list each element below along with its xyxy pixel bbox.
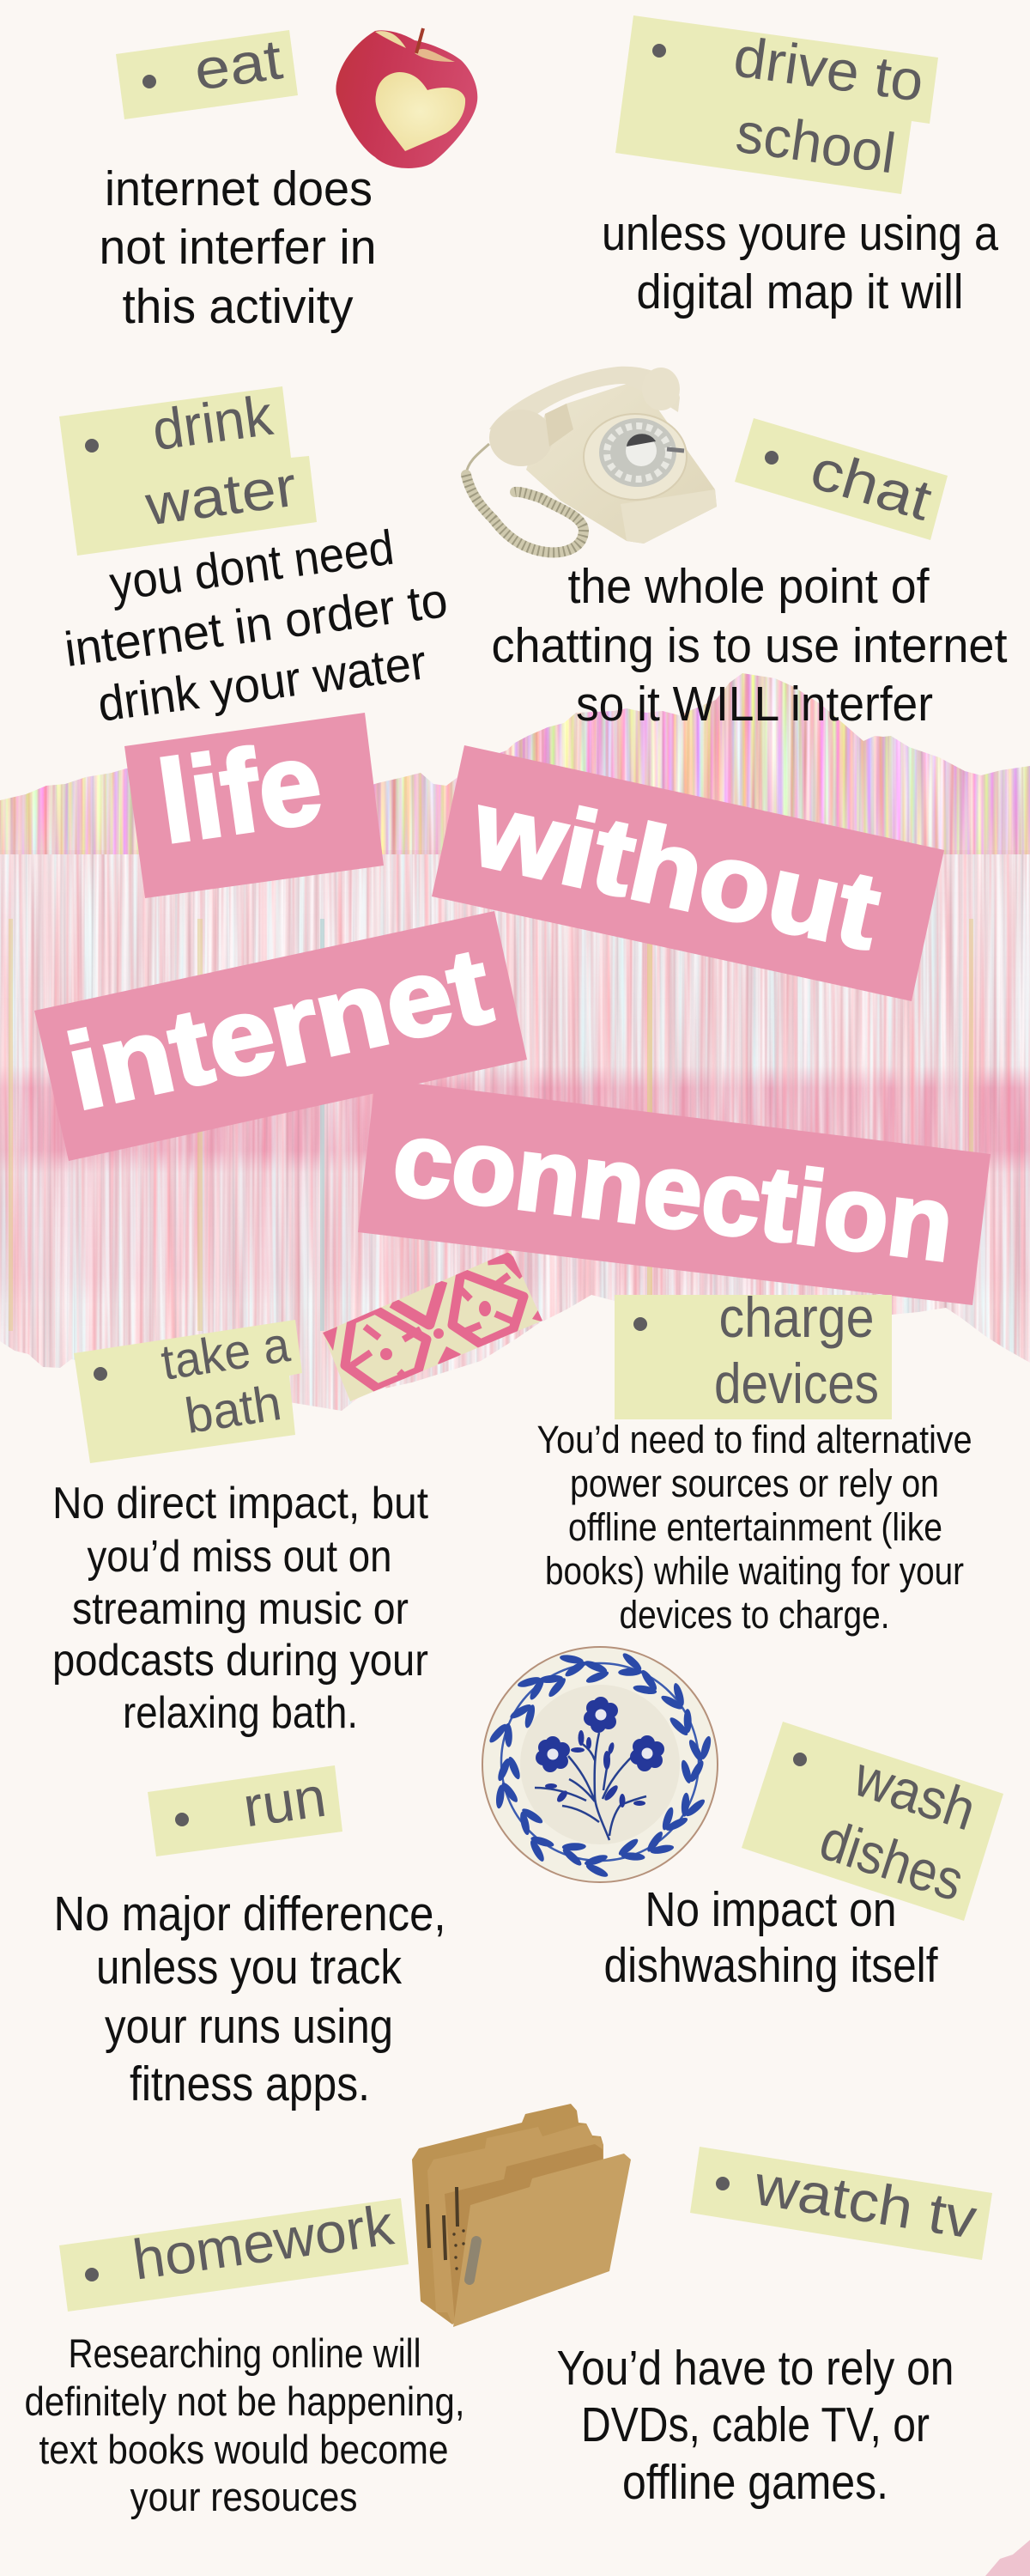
text: run description [53,1886,446,2111]
tag: drive to school: school [732,100,900,185]
text: take a bath description: No direct impact, but [52,1479,428,1528]
torn paper band with woven stripes [0,670,1030,1417]
panel: watch tv [556,2147,992,2510]
text: homework description: text books would become [39,2427,448,2472]
tag: homework [59,2192,409,2312]
text: charge devices description: offline entertainment (like [568,1505,942,1549]
panel: drink water [59,383,451,732]
title word: internet [34,911,527,1161]
text: eat description [100,161,376,334]
text: wash dishes description: No impact on [645,1882,896,1937]
tag: drink water: drink [148,383,277,462]
tag: run: run [239,1765,330,1838]
text: run description: No major difference, [53,1886,446,1941]
text: charge devices description: You’d need to find alternative [537,1418,972,1461]
tag: watch tv [690,2147,992,2260]
text: wash dishes description [604,1882,938,1993]
text: drink water description [62,520,451,732]
tag: take a bath: take a [158,1316,294,1391]
tag: drink water [59,383,317,556]
text: drink water description: you dont need [106,520,397,612]
text: watch tv description: DVDs, cable TV, or [581,2397,930,2452]
text: run description: your runs using [105,1999,393,2054]
text: take a bath description: streaming music or [72,1584,409,1634]
text: chat description: chatting is to use internet [491,618,1008,673]
tag: charge devices: charge [719,1285,874,1349]
tag: eat: eat [191,27,286,102]
text: homework description: your resouces [130,2474,357,2519]
tag: run [148,1765,342,1856]
panel: drive to school [602,15,998,319]
title word: internet: internet [58,926,500,1133]
title word: life [124,713,384,898]
text: charge devices description: devices to charge. [620,1593,889,1637]
icon: blue floral plate [482,1647,718,1882]
title word: life: life [151,717,329,867]
text: charge devices description [537,1418,972,1637]
panel: run [53,1765,446,2111]
text: watch tv description [556,2341,954,2510]
text: eat description: not interfer in [100,220,376,275]
icon: patterned fabric tape [323,1251,542,1401]
title word: connection: connection [387,1099,960,1283]
text: homework description: Researching online will [69,2330,421,2376]
text: drive to school description [602,206,998,319]
tag: chat [735,418,948,540]
tag: wash dishes: wash [846,1744,984,1842]
icon: rotary telephone [466,367,717,552]
text: take a bath description: podcasts during your [52,1636,428,1686]
text: eat description: internet does [105,161,373,216]
tag: take a bath: bath [181,1375,285,1444]
tag: drink water: water [141,454,300,538]
text: drink water description: drink your water [94,635,429,732]
icon: apple with heart bite [336,28,477,168]
text: wash dishes description: dishwashing itself [604,1938,938,1993]
text: watch tv description: offline games. [622,2455,888,2510]
tag: charge devices [615,1285,892,1419]
text: take a bath description [52,1479,428,1738]
text: run description: unless you track [96,1940,402,1995]
tag: homework: homework [129,2192,398,2292]
tag: wash dishes [742,1722,1003,1921]
text: chat description: so it WILL interfer [576,677,933,732]
panel: chat [491,418,1008,732]
tag: drive to school: drive to [730,24,928,113]
text: chat description [491,559,1008,732]
text: charge devices description: power sources or rely on [570,1461,939,1505]
text: homework description: definitely not be happening, [24,2379,465,2424]
torn paper corner [985,2540,1030,2576]
text: watch tv description: You’d have to rely on [556,2341,954,2396]
text: drink water description: internet in order to [62,573,451,677]
title word: without [432,745,944,1001]
text: drive to school description: digital map it will [637,264,963,319]
tag: chat: chat [804,437,939,532]
text: run description: fitness apps. [130,2057,370,2111]
title word: without: without [463,768,889,972]
tag: charge devices: devices [714,1352,879,1415]
text: take a bath description: you’d miss out on [88,1532,391,1582]
panel: eat [100,27,376,334]
tag: drive to school [615,15,938,194]
text: eat description: this activity [122,279,354,334]
tag: eat [116,27,298,119]
text: charge devices description: books) while waiting for your [545,1549,964,1593]
panel: homework [24,2192,465,2519]
text: chat description: the whole point of [568,559,930,614]
panel: charge devices [537,1285,972,1637]
tag: take a bath [74,1316,302,1463]
text: take a bath description: relaxing bath. [123,1688,358,1738]
tag: wash dishes: dishes [813,1807,972,1913]
icon: manila file folders [412,2104,631,2327]
panel: take a bath [52,1316,428,1738]
text: homework description [24,2330,465,2519]
title: life without internet connection [34,713,991,1305]
tag: watch tv: watch tv [749,2153,981,2251]
panel: wash dishes [604,1722,1003,1993]
